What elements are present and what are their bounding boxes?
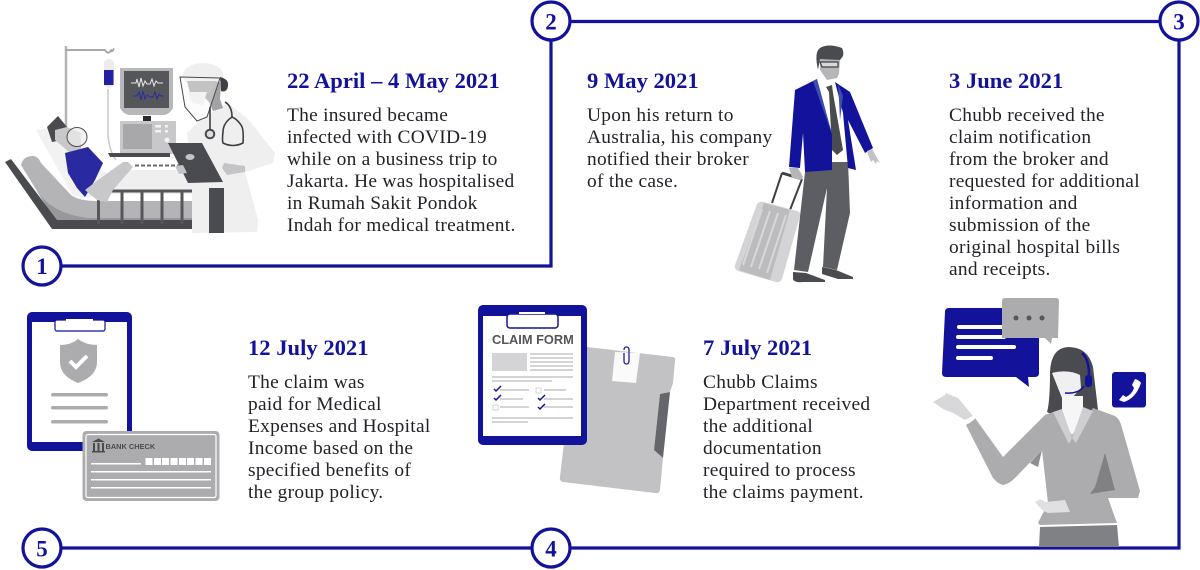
text block: step 1: Jakarta. He was hospitalised bbox=[287, 171, 515, 192]
text block: step 1: The insured became bbox=[287, 105, 448, 126]
text block: step 4 bbox=[703, 335, 870, 503]
text block: step 4: documentation bbox=[703, 438, 822, 459]
icon: phone badge bbox=[1112, 372, 1146, 408]
text block: step 5: The claim was bbox=[248, 372, 365, 393]
form heading: CLAIM FORM bbox=[492, 332, 574, 347]
step marker 3 bbox=[1160, 2, 1198, 40]
text block: step 5: 12 July 2021 bbox=[248, 335, 369, 360]
text block: step 4: 7 July 2021 bbox=[703, 335, 812, 360]
text block: step 2: Australia, his company bbox=[587, 127, 772, 148]
text block: step 2 bbox=[587, 68, 772, 192]
text block: step 3: submission of the bbox=[949, 215, 1091, 236]
illustration: call centre agent bbox=[933, 298, 1146, 547]
icon: doctor bbox=[180, 63, 275, 233]
icon: shield with check bbox=[60, 339, 97, 383]
text block: step 1: infected with COVID-19 bbox=[287, 127, 487, 148]
icon: IV drip stand bbox=[65, 46, 116, 160]
text block: step 3: original hospital bills bbox=[949, 237, 1120, 258]
step marker 4 bbox=[532, 529, 570, 567]
step marker 5: 5 bbox=[36, 536, 48, 562]
text block: step 1: while on a business trip to bbox=[287, 149, 498, 170]
step marker 2: 2 bbox=[545, 10, 557, 34]
step marker 1 bbox=[23, 247, 61, 285]
text block: step 3: requested for additional bbox=[949, 171, 1140, 192]
text block: step 3: and receipts. bbox=[949, 259, 1051, 280]
text block: step 4: required to process bbox=[703, 460, 856, 481]
text block: step 3: information and bbox=[949, 193, 1078, 214]
text block: step 1: in Rumah Sakit Pondok bbox=[287, 193, 478, 214]
icon: businessman bbox=[789, 46, 880, 282]
text block: step 5 bbox=[248, 335, 431, 503]
text block: step 4: the additional bbox=[703, 416, 813, 437]
icon: bank check bbox=[82, 431, 220, 501]
step marker 3: 3 bbox=[1173, 10, 1185, 34]
text block: step 1 bbox=[287, 68, 516, 236]
text block: step 1: Indah for medical treatment. bbox=[287, 215, 516, 236]
text block: step 3: 3 June 2021 bbox=[949, 68, 1063, 93]
step marker 5 bbox=[23, 529, 61, 567]
step marker 1: 1 bbox=[36, 254, 48, 279]
icon: blue speech bubble bbox=[942, 308, 1039, 387]
icon: agent bbox=[933, 347, 1140, 547]
text block: step 4: Department received bbox=[703, 394, 870, 415]
text block: step 2: of the case. bbox=[587, 171, 678, 192]
text block: step 3: claim notification bbox=[949, 127, 1091, 148]
icon: folder bbox=[560, 347, 675, 493]
text block: step 5: specified benefits of bbox=[248, 460, 411, 481]
text block: step 5: Income based on the bbox=[248, 438, 413, 459]
illustration: patient in hospital bed with doctor bbox=[5, 46, 275, 233]
illustration: claim form clipboard and folder bbox=[478, 305, 675, 493]
icon: patient bbox=[47, 116, 133, 202]
text block: step 5: Expenses and Hospital bbox=[248, 416, 431, 437]
text block: step 2: notified their broker bbox=[587, 149, 749, 170]
text block: step 5: the group policy. bbox=[248, 482, 383, 503]
icon: heart monitor bbox=[108, 68, 180, 166]
text block: step 4: the claims payment. bbox=[703, 482, 864, 503]
illustration: policy clipboard and bank check bbox=[27, 312, 220, 501]
text block: step 3: Chubb received the bbox=[949, 105, 1105, 126]
icon: grey speech bubble bbox=[1002, 298, 1059, 344]
step marker 4: 4 bbox=[545, 536, 557, 562]
icon: tablet bbox=[168, 143, 223, 183]
icon: bed bbox=[5, 126, 192, 229]
icon: suitcase bbox=[735, 173, 802, 282]
panel: claim form clipboard bbox=[478, 305, 587, 445]
illustration: businessman with suitcase bbox=[735, 46, 880, 282]
text block: step 2: Upon his return to bbox=[587, 105, 734, 126]
text block: step 3 bbox=[949, 68, 1140, 280]
text block: step 3: from the broker and bbox=[949, 149, 1109, 170]
step marker 2 bbox=[532, 2, 570, 40]
text block: step 2: 9 May 2021 bbox=[587, 68, 699, 93]
text block: step 1: 22 April – 4 May 2021 bbox=[287, 68, 500, 93]
text block: step 5: paid for Medical bbox=[248, 394, 382, 415]
check label: BANK CHECK bbox=[106, 442, 156, 451]
text block: step 4: Chubb Claims bbox=[703, 372, 818, 393]
panel: policy clipboard bbox=[27, 312, 132, 451]
